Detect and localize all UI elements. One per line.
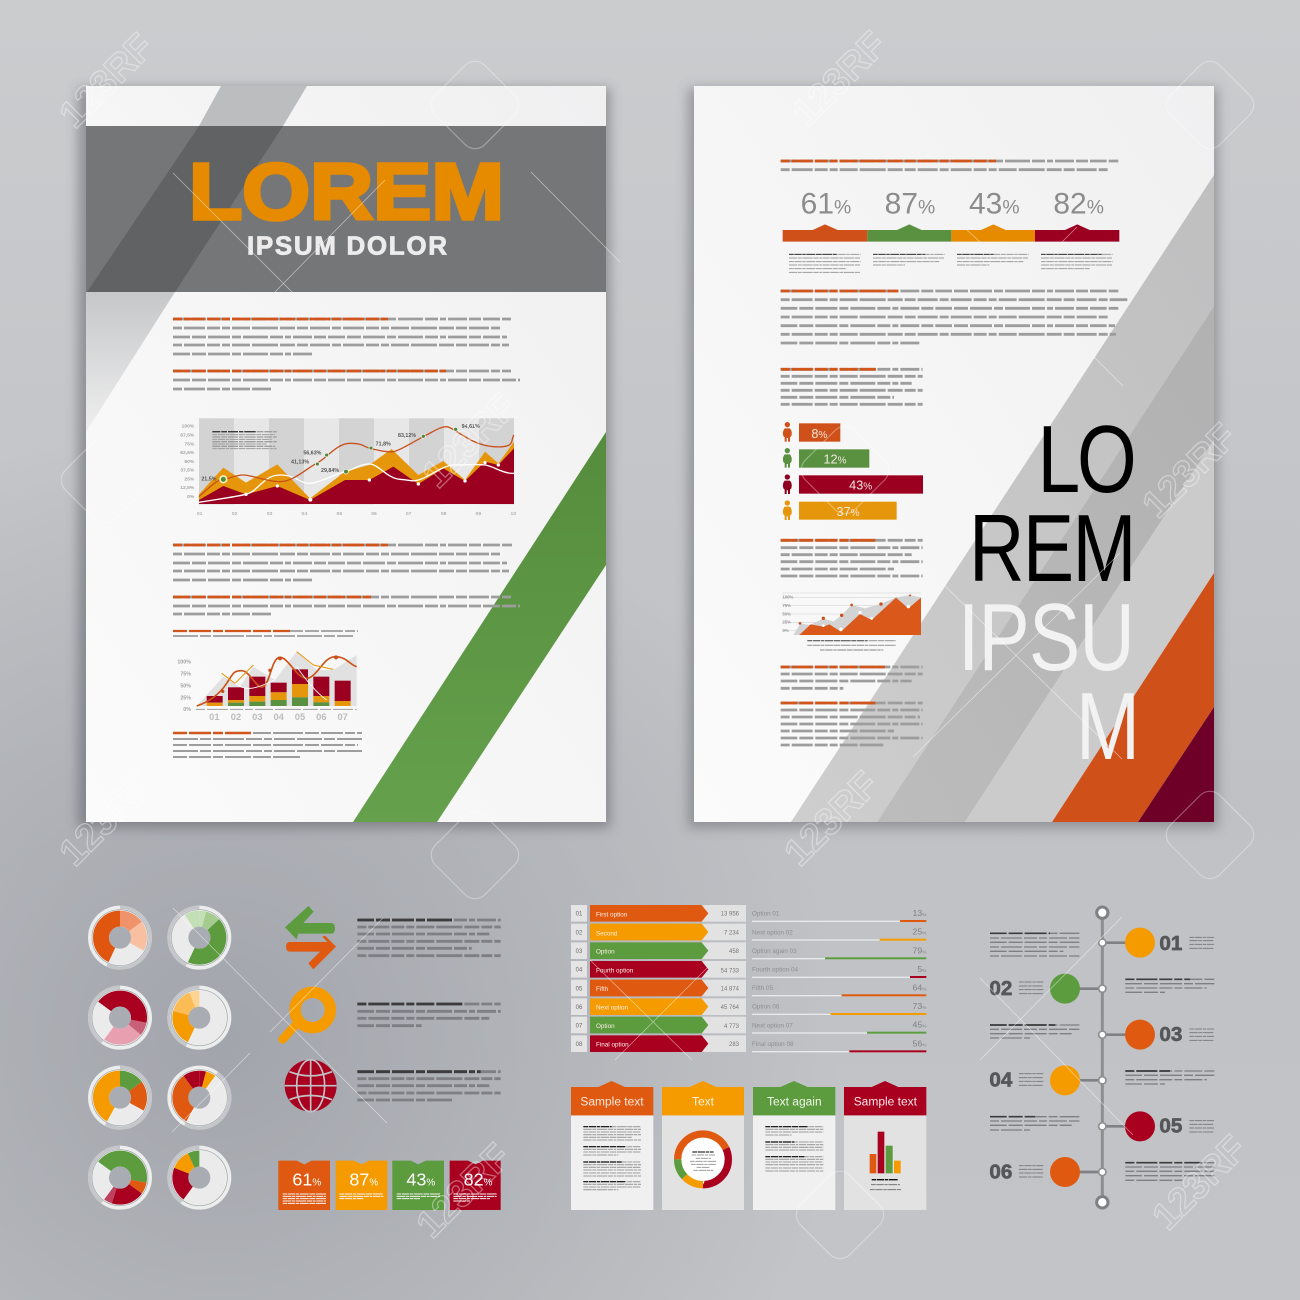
step 01 text: [990, 933, 1079, 956]
row labels: [596, 912, 634, 1049]
donut 5: [88, 1066, 152, 1130]
step 06: 06: [989, 1160, 1012, 1183]
watermark overlay: 123RF: [777, 764, 887, 874]
area line chart: 12,5%: [180, 485, 195, 491]
small area chart: 100%: [782, 595, 794, 600]
donut 7: [88, 1146, 152, 1210]
option percents: 5%: [917, 964, 926, 974]
area line chart: 62,5%: [180, 450, 195, 456]
step 02: 02: [989, 977, 1012, 1000]
percentage header section: [781, 161, 1127, 343]
step 04 text: [1125, 1071, 1214, 1084]
row labels: Fifth: [596, 986, 609, 993]
icon: globe: [285, 1060, 337, 1112]
area line chart: 41,13%: [291, 459, 309, 465]
stacked bar chart: 50%: [180, 683, 191, 689]
stacked bar chart: 75%: [180, 671, 191, 677]
stacked bar chart: 04: [273, 712, 285, 722]
option labels: Fifth 05: [752, 985, 774, 992]
option percents: 73%: [913, 1001, 926, 1011]
area line chart: 56,63%: [303, 450, 322, 456]
option labels: Option 01: [752, 911, 780, 918]
area line chart: 09: [476, 511, 481, 517]
stacked bar chart: [177, 652, 357, 722]
row numbers: 03: [576, 949, 583, 955]
stat 43%: 43%: [969, 187, 1020, 220]
step 03: [1125, 1020, 1214, 1050]
tile 43%: [392, 1161, 444, 1210]
option labels: [752, 911, 799, 1048]
text block 6: [173, 733, 362, 757]
stacked bar chart: 02: [231, 712, 241, 722]
stacked bar chart: 25%: [180, 695, 191, 701]
paragraph: [781, 667, 923, 688]
row values: 54 733: [721, 968, 740, 974]
row numbers: 04: [576, 968, 583, 974]
tile 87%: [336, 1161, 387, 1210]
panel: left brochure page: [78, 86, 610, 828]
row numbers: 05: [576, 986, 583, 992]
option percents: 64%: [913, 982, 926, 992]
text: magnifier: [357, 1004, 501, 1026]
mini bar chart: [870, 1132, 901, 1173]
row numbers: [576, 912, 583, 1048]
area line chart: 01: [197, 511, 203, 517]
tile 82%: 82%: [464, 1170, 493, 1190]
paragraph: [781, 369, 923, 404]
number cells: [571, 905, 587, 1052]
step 03 text: [990, 1025, 1079, 1038]
stacked bar chart: 100%: [177, 659, 191, 665]
watermark overlay: 123RF: [415, 386, 525, 496]
watermark overlay: 123RF: [52, 764, 162, 874]
panel: right brochure page: [688, 86, 1218, 828]
card 1: [571, 1081, 653, 1210]
icon: magnifier: [283, 992, 330, 1039]
text block 3: [173, 545, 512, 580]
left column content: [781, 369, 923, 745]
header band: [86, 86, 606, 432]
option percents: 79%: [913, 945, 926, 955]
area line chart: 0%: [187, 494, 195, 500]
row values: [721, 912, 740, 1048]
panel: donut charts: [88, 906, 231, 1210]
stacked bar chart: 03: [252, 712, 263, 722]
stat captions: [789, 254, 1113, 272]
intro paragraph: [781, 291, 1127, 343]
row numbers: 08: [576, 1042, 583, 1048]
row values: 7 234: [724, 930, 740, 936]
step 02: [989, 974, 1080, 1004]
row numbers: 02: [576, 930, 583, 936]
subtitle: IPSUM DOLOR: IPSUM DOLOR: [247, 230, 447, 260]
area line chart: 04: [302, 511, 307, 517]
card 3: [753, 1081, 835, 1210]
area line chart: 71,8%: [376, 442, 391, 448]
paragraph: [781, 703, 923, 745]
small area chart: 0%: [782, 628, 789, 633]
row values: 45 764: [721, 1005, 740, 1011]
small area chart: 25%: [782, 620, 791, 625]
small area chart: [782, 593, 921, 650]
donut 1: [88, 906, 152, 970]
timeline axis: [1065, 907, 1140, 1208]
step 06: [989, 1157, 1080, 1187]
large title: M: [1076, 673, 1140, 780]
area line chart: 21,5%: [201, 477, 217, 483]
row labels: Second: [596, 930, 618, 937]
donut 6: [167, 1066, 231, 1130]
diagonal stripes: [791, 175, 1214, 822]
stacked bar chart: 0%: [183, 707, 191, 713]
large title: IPSU: [958, 584, 1134, 691]
area line chart: [180, 418, 516, 517]
chart note: [212, 432, 277, 449]
ring chart: [678, 1134, 728, 1185]
row labels: Option: [596, 1023, 615, 1030]
option labels: Final option 08: [752, 1041, 794, 1048]
people bar chart: 8%: [811, 427, 827, 441]
step 05: 05: [1159, 1115, 1182, 1138]
stat 61%: 61%: [801, 187, 851, 220]
icon: exchange arrows: [285, 906, 336, 969]
area line chart: 05: [337, 511, 342, 517]
stacked bar chart: 05: [295, 712, 305, 722]
percent tiles: [278, 1161, 501, 1210]
tile 87%: 87%: [349, 1170, 378, 1190]
card 3: Text again: [767, 1095, 822, 1109]
text: arrows: [357, 920, 501, 956]
donut 8: [167, 1146, 231, 1210]
small area chart: 75%: [782, 603, 791, 608]
step 05 text: [990, 1117, 1079, 1130]
card 1: Sample text: [580, 1095, 644, 1109]
watermark overlay: 123RF: [1135, 416, 1245, 526]
value cells: [702, 905, 746, 1052]
title: LOREM: LOREM: [189, 147, 504, 236]
tile 43%: 43%: [406, 1170, 435, 1190]
watermark overlay: 123RF: [409, 1136, 519, 1246]
people bar chart: [783, 422, 923, 520]
stat 87%: 87%: [885, 187, 935, 220]
large title: REM: [969, 495, 1135, 602]
panel: icons with text: [278, 906, 501, 1210]
area line chart: 83,12%: [398, 433, 416, 439]
large title: [958, 406, 1140, 780]
people bar chart: 12%: [824, 453, 847, 467]
row values: 283: [729, 1042, 740, 1048]
progress lines: [752, 920, 926, 1052]
step 03: 03: [1159, 1023, 1182, 1046]
step 04: 04: [989, 1069, 1013, 1092]
step 04: [989, 1065, 1080, 1095]
card 2: Text: [692, 1095, 715, 1109]
arrow bars: [590, 905, 708, 1052]
people bar chart: 37%: [837, 505, 860, 519]
option labels: Next option 07: [752, 1022, 793, 1029]
card 4: [844, 1081, 926, 1210]
row values: 4 773: [724, 1024, 740, 1030]
area line chart: 29,84%: [321, 468, 339, 474]
row labels: Next option: [596, 1004, 628, 1011]
text: globe: [357, 1072, 501, 1100]
diagonal green band: [353, 432, 606, 822]
area line chart: 37,5%: [180, 468, 195, 474]
card 4: Sample text: [854, 1095, 918, 1109]
step 02 text: [1125, 979, 1214, 992]
area line chart: 94,61%: [462, 424, 480, 430]
option percents: 13%: [913, 908, 926, 918]
watermark overlay: 123RF: [785, 24, 895, 134]
colored tab bar: [783, 224, 1119, 242]
area line chart: 07: [406, 511, 412, 517]
panel: sample cards: [571, 1081, 926, 1210]
watermark overlay: 123RF: [1145, 1128, 1255, 1238]
row numbers: 01: [576, 912, 583, 918]
stacked bar chart: 06: [316, 712, 327, 722]
step 06 text: [1125, 1163, 1214, 1180]
option labels: Option 06: [752, 1004, 780, 1011]
row labels: Fourth option: [596, 967, 634, 974]
area line chart: 50%: [184, 459, 195, 465]
option percents: 25%: [913, 927, 926, 937]
area line chart: 03: [267, 511, 273, 517]
step 01: [1125, 928, 1214, 958]
stacked bar chart: 07: [337, 712, 348, 722]
area line chart: 100%: [182, 424, 195, 430]
area line chart: 08: [441, 511, 447, 517]
donut 4: [167, 986, 231, 1050]
stat 82%: 82%: [1053, 187, 1104, 220]
step 01: 01: [1159, 932, 1182, 955]
step 05: [1125, 1111, 1214, 1141]
small area chart: 50%: [782, 611, 791, 616]
donut 3: [88, 986, 152, 1050]
row labels: First option: [596, 912, 628, 919]
panel: option table: [571, 905, 926, 1052]
row numbers: 06: [576, 1005, 583, 1011]
row values: 13 956: [721, 912, 740, 918]
row labels: Option: [596, 949, 615, 956]
large title: LO: [1038, 406, 1134, 513]
text block 1: [173, 319, 511, 354]
area line chart: 25%: [184, 476, 195, 482]
stacked bar chart: 01: [209, 712, 220, 722]
area line chart: 75%: [184, 441, 195, 447]
people bar chart: 43%: [849, 479, 872, 493]
paragraph: [781, 540, 923, 576]
row values: 14 874: [721, 986, 740, 992]
area line chart: 87,5%: [180, 433, 195, 439]
option percents: 45%: [913, 1020, 926, 1030]
tile 61%: [278, 1161, 330, 1210]
tile 61%: 61%: [292, 1170, 321, 1190]
area line chart: 02: [232, 511, 238, 517]
option percents: [913, 908, 926, 1048]
row values: 458: [729, 949, 740, 955]
tile 82%: [450, 1161, 501, 1210]
row labels: Final option: [596, 1042, 629, 1049]
donut 2: [167, 906, 231, 970]
watermark overlay: 123RF: [52, 26, 162, 136]
area line chart: 06: [371, 511, 377, 517]
text block 2: [173, 371, 520, 389]
text block 4: [173, 597, 520, 614]
card 2: [662, 1081, 744, 1210]
row numbers: 07: [576, 1024, 583, 1030]
text block 5: [173, 631, 358, 636]
option labels: Fourth option 04: [752, 967, 799, 974]
option labels: Next option 02: [752, 929, 793, 936]
area line chart: 10: [511, 511, 516, 517]
panel: timeline: [989, 907, 1214, 1208]
option percents: 56%: [913, 1038, 926, 1048]
option labels: Option again 03: [752, 948, 797, 955]
